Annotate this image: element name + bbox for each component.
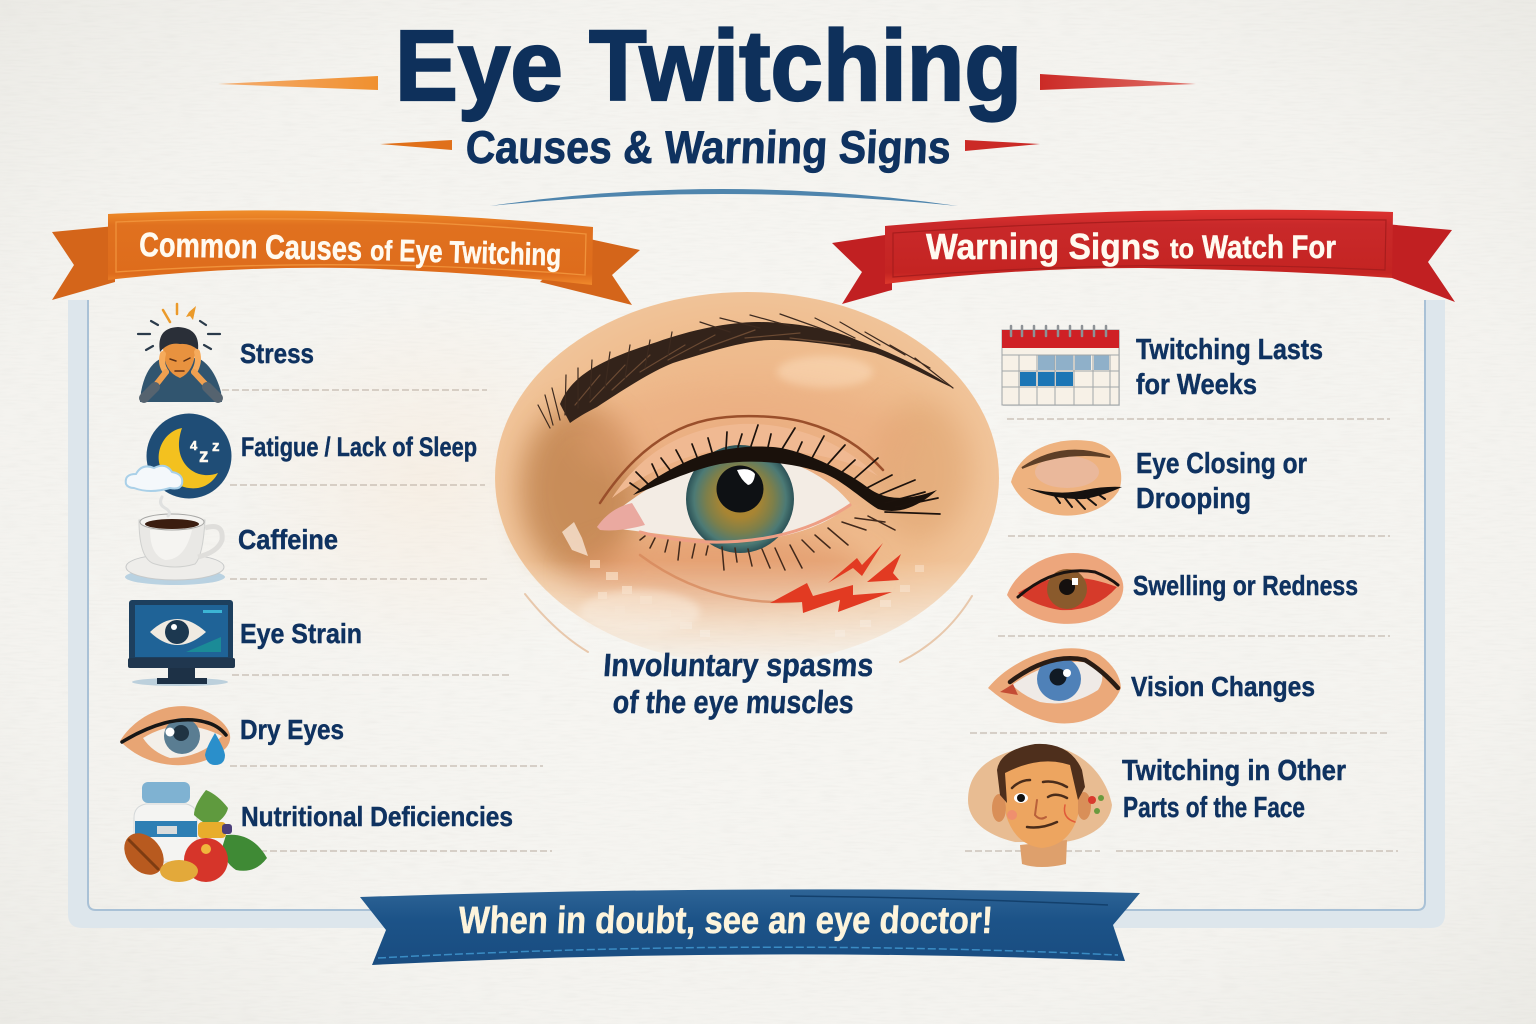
icon: dry eye with tear	[120, 706, 230, 765]
panel: content frame	[68, 290, 1445, 928]
label: swelling: Swelling or Redness	[1133, 570, 1358, 601]
icon: moon and cloud: z	[212, 438, 220, 455]
icon: winking face	[968, 744, 1112, 867]
banner text	[926, 226, 1336, 267]
eyebrow	[538, 314, 953, 428]
subheading: Causes and Warning Signs: Causes & Warning Signs	[464, 121, 952, 173]
banner: warning signs	[832, 210, 1455, 304]
icon: stressed man	[138, 304, 222, 402]
banner text: of	[370, 235, 393, 266]
icon: moon and cloud: 4	[190, 438, 198, 453]
banner: see an eye doctor	[360, 889, 1140, 965]
sign: swelling	[1007, 553, 1358, 624]
label: caffeine: Caffeine	[238, 524, 338, 555]
lower lid rim	[640, 505, 850, 542]
label: dry eyes: Dry Eyes	[240, 714, 344, 745]
tear duct	[597, 503, 645, 530]
twitch bolts	[770, 543, 901, 613]
upper lash line	[633, 446, 937, 511]
skin mottling	[590, 560, 924, 637]
upper lashes	[630, 425, 940, 514]
banner text: When in doubt, see an eye doctor!	[458, 900, 994, 942]
banner text: to	[1170, 233, 1194, 264]
cause: nutritional deficiencies	[116, 782, 513, 883]
label: fatigue: Fatigue / Lack of Sleep	[241, 432, 477, 462]
icon: coffee cup	[125, 497, 225, 585]
caption: involuntary spasms: of the eye muscles	[612, 684, 855, 720]
sign: facial twitching	[968, 744, 1346, 867]
upper crease	[600, 416, 883, 503]
outer ghost strokes	[525, 594, 588, 652]
cause: eye strain	[128, 600, 362, 686]
eyelid fill	[612, 424, 878, 498]
label: stress: Stress	[240, 338, 314, 369]
label: nutritional deficiencies: Nutritional Deficiencies	[241, 801, 513, 832]
skin circle	[495, 292, 999, 664]
cause: fatigue	[126, 414, 477, 498]
icon: blue eye	[988, 648, 1121, 723]
sign: lasts for weeks	[1002, 326, 1323, 406]
caption: involuntary spasms: Involuntary spasms	[602, 647, 875, 683]
sign: facial twitching: Parts of the Face	[1123, 792, 1305, 824]
sign: eye closing	[1011, 440, 1307, 516]
banner text: Common Causes	[139, 226, 363, 268]
panel: eye illustration	[495, 292, 999, 664]
cause: dry eyes	[120, 706, 344, 765]
sclera	[597, 455, 850, 541]
label: vision changes: Vision Changes	[1131, 671, 1315, 702]
iris	[686, 445, 794, 553]
banner text: Eye Twitching	[399, 233, 562, 273]
icon: closed eye	[1011, 440, 1122, 516]
under-eye crease	[640, 555, 850, 602]
sign: vision changes	[988, 648, 1315, 723]
icon: moon and cloud: z	[199, 446, 208, 467]
label: facial twitching: Twitching in Other	[1122, 755, 1346, 787]
heading: Eye Twitching: Eye Twitching	[395, 10, 1022, 122]
cause: stress	[138, 304, 314, 402]
dividers	[222, 390, 1398, 851]
banner text: Watch For	[1202, 229, 1336, 265]
title ornaments	[218, 74, 1196, 206]
icon: red eye	[1007, 553, 1123, 624]
icon: moon and cloud	[126, 414, 232, 498]
cause: caffeine	[125, 497, 338, 585]
label: eye strain: Eye Strain	[240, 618, 362, 649]
icon: calendar	[1002, 326, 1120, 406]
icon: monitor with eye	[128, 600, 235, 686]
banner text: Warning Signs	[926, 226, 1160, 267]
banner: common causes	[52, 210, 640, 305]
list: common causes	[116, 304, 513, 883]
label: lasts for weeks: Twitching Lasts	[1136, 334, 1323, 366]
list: warning signs	[968, 326, 1358, 867]
title	[395, 10, 1022, 173]
sign: eye closing: Drooping	[1136, 483, 1251, 515]
icon: vitamins and food	[116, 782, 267, 883]
sign: lasts for weeks: for Weeks	[1136, 369, 1257, 401]
label: eye closing: Eye Closing or	[1136, 448, 1307, 480]
caption: involuntary spasms	[600, 647, 875, 720]
lower lashes	[640, 516, 895, 570]
banner text	[139, 226, 562, 273]
tear-duct highlight	[562, 522, 588, 556]
